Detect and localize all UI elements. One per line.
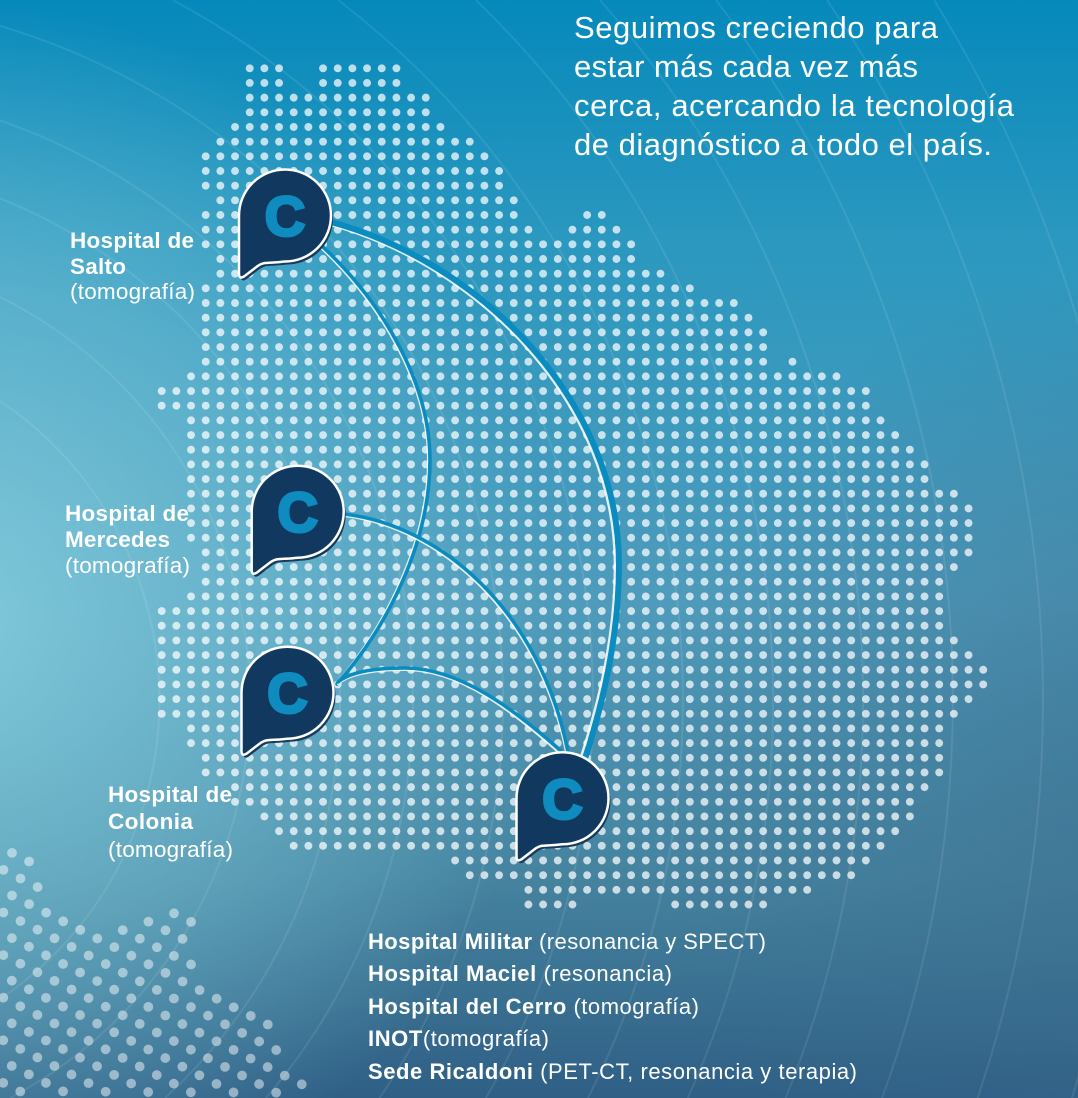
pin: Montevideo: C [542, 767, 583, 830]
arc: Salto to Montevideo (thick) [331, 222, 619, 762]
pin: Hospital de Colonia: C [267, 662, 308, 725]
decorative dot field bottom left [3, 853, 302, 1093]
pin: Hospital de Salto [239, 170, 333, 280]
headline: de diagnóstico a todo el país. [574, 127, 992, 162]
list of Montevideo centres: Hospital del Cerro (tomografía) [368, 994, 699, 1019]
arc: Salto to Colonia [321, 246, 430, 684]
label: Hospital de Colonia: Colonia [108, 809, 193, 834]
label: Hospital de Salto: Salto [70, 254, 126, 279]
list of Montevideo centres: Hospital Militar (resonancia y SPECT) [368, 929, 766, 954]
list of Montevideo centres [368, 929, 857, 1084]
pin: Montevideo [516, 752, 610, 863]
label: Hospital de Salto: Hospital de [70, 228, 194, 253]
arc: Mercedes to Montevideo [344, 514, 568, 752]
label: Hospital de Salto: (tomografía) [70, 279, 195, 304]
connection arcs between pins [321, 222, 619, 762]
label: Hospital de Mercedes [65, 501, 190, 578]
pin: Hospital de Mercedes [252, 466, 346, 577]
pin: Hospital de Colonia [242, 647, 336, 758]
list of Montevideo centres: INOT(tomografía) [368, 1026, 549, 1051]
dotted map of Uruguay [162, 68, 984, 904]
headline: estar más cada vez más [574, 49, 918, 84]
label: Hospital de Mercedes: Mercedes [65, 527, 170, 552]
pin: Hospital de Mercedes: C [277, 481, 318, 544]
arc: Colonia to Montevideo [338, 668, 560, 752]
list of Montevideo centres: Hospital Maciel (resonancia) [368, 961, 672, 986]
label: Hospital de Colonia [108, 782, 233, 862]
list of Montevideo centres: Sede Ricaldoni (PET-CT, resonancia y terapia) [368, 1059, 857, 1084]
label: Hospital de Colonia: (tomografía) [108, 837, 233, 862]
label: Hospital de Colonia: Hospital de [108, 782, 232, 807]
headline: Seguimos creciendo para [574, 10, 939, 45]
headline: cerca, acercando la tecnología [574, 88, 1015, 123]
label: Hospital de Mercedes: (tomografía) [65, 553, 190, 578]
pin: Hospital de Salto: C [265, 184, 305, 248]
label: Hospital de Mercedes: Hospital de [65, 501, 189, 526]
headline [574, 10, 1015, 162]
label: Hospital de Salto [70, 228, 195, 304]
